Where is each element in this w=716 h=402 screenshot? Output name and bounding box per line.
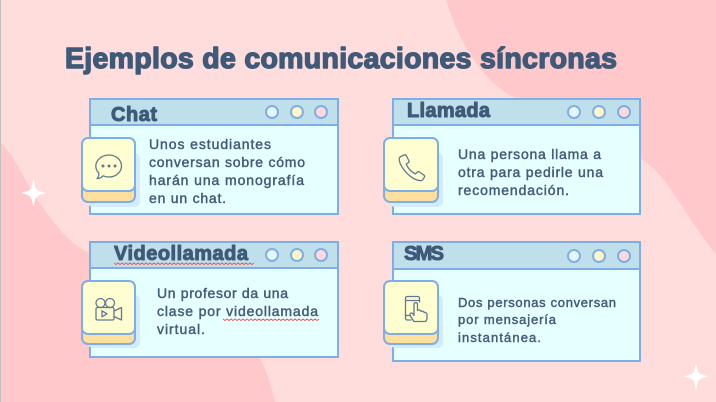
panel: Videollamada [82, 242, 338, 357]
title: Ejemplos de comunicaciones síncronas [65, 43, 617, 75]
window header [393, 242, 640, 269]
window body [393, 242, 640, 361]
text: Llamada description: recomendación. [458, 182, 569, 198]
window buttons [568, 106, 630, 118]
text: Llamada description: otra para pedirle una [458, 164, 603, 180]
background blob: top right [446, 0, 716, 254]
heading: SMS: SMS [404, 243, 444, 265]
background blob: bottom left [0, 142, 275, 402]
icon tile: telephone handset [384, 138, 443, 207]
window buttons [568, 250, 630, 262]
text: Llamada description [458, 146, 603, 198]
icon tile: smartphone and hand [384, 281, 443, 348]
heading: Chat: Chat [111, 104, 157, 126]
icon: right sparkle [685, 365, 707, 389]
text: SMS description: instantánea. [458, 330, 541, 345]
window body [90, 242, 338, 357]
text: Chat description [149, 136, 305, 206]
icon: left sparkle [22, 181, 44, 206]
panel: SMS [384, 242, 640, 361]
text: Chat description: en un chat. [149, 190, 226, 206]
panel: Chat [82, 99, 338, 214]
window header [90, 242, 338, 268]
text: Chat description: Unos estudiantes [149, 136, 271, 152]
text: Llamada description: Una persona llama a [458, 146, 601, 162]
left edge line [0, 0, 1, 402]
text: SMS description [458, 295, 616, 345]
window header [90, 99, 338, 125]
heading: Videollamada: Videollamada [114, 243, 249, 265]
window body [393, 99, 640, 214]
text: Chat description: conversan sobre cómo [149, 154, 305, 170]
text: Chat description: harán una monografía [149, 172, 304, 188]
text: Videollamada description [157, 285, 318, 337]
text: SMS description: Dos personas conversan [458, 295, 616, 310]
panel: Llamada [384, 99, 640, 214]
window buttons [266, 249, 327, 261]
icon tile: chat bubble [82, 138, 140, 207]
spellcheck underline: heading [114, 263, 254, 264]
window buttons [266, 106, 327, 118]
heading: Llamada: Llamada [407, 100, 491, 122]
window body [90, 99, 338, 214]
text: Videollamada description: virtual. [157, 321, 205, 337]
spellcheck underline: description [223, 319, 319, 320]
text: SMS description: por mensajería [458, 312, 557, 327]
text: Videollamada description: clase por videollamada [157, 303, 318, 319]
icon tile: video camera [82, 281, 140, 348]
window header [393, 99, 640, 125]
text: Videollamada description: Un profesor da una [157, 285, 288, 301]
